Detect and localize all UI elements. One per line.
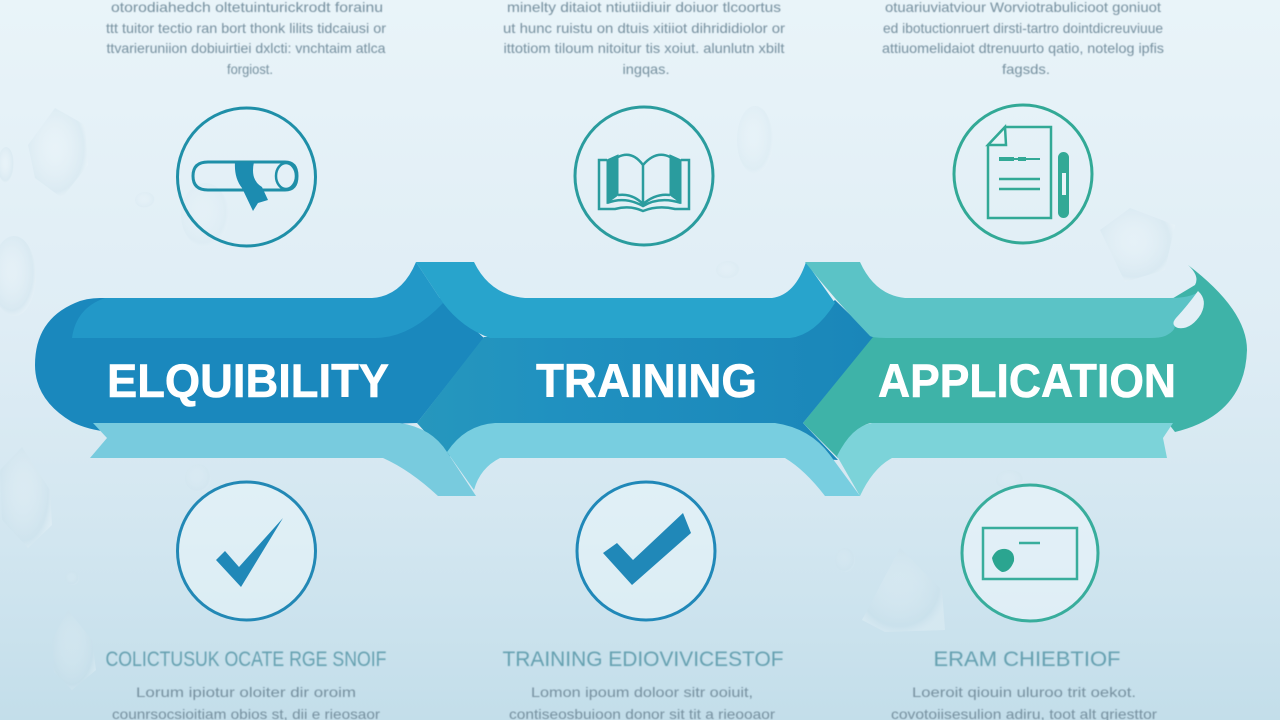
top text block: training: ut hunc ruistu on dtuis xitiiot dihrididiolor or bbox=[503, 20, 785, 36]
top text block: training bbox=[503, 0, 785, 77]
icon: checkmark, training bbox=[577, 482, 715, 620]
banner label: eligibility: ELQUIBILITY bbox=[107, 354, 389, 407]
icon: open book bbox=[575, 107, 713, 245]
bottom text block: application: Loeroit qiouin uluroo trit oekot. bbox=[912, 684, 1136, 700]
top text block: application: ed ibotuctionruert dirsti-tartro dointdicreuviuue bbox=[883, 20, 1163, 36]
banner segment: eligibility body bbox=[35, 298, 484, 432]
banner segment: application body bbox=[803, 265, 1247, 458]
banner highlight: water drop notch bbox=[1173, 291, 1204, 328]
icon: exam card bbox=[962, 485, 1098, 621]
banner label: training: TRAINING bbox=[536, 354, 757, 407]
top text block: eligibility: forgiost. bbox=[227, 61, 273, 77]
top text block: eligibility bbox=[106, 0, 386, 77]
banner strip: training top bbox=[416, 262, 835, 338]
banner ribbon: training bottom bbox=[447, 423, 860, 496]
icon: diploma scroll bbox=[178, 108, 316, 246]
bottom heading: training: TRAINING EDIOVIVICESTOF bbox=[502, 648, 784, 671]
bottom text block: eligibility bbox=[112, 684, 380, 720]
icon: document and pen bbox=[954, 105, 1092, 243]
banner label: application: APPLICATION bbox=[878, 354, 1176, 407]
top text block: application: attiuomelidaiot dtrenuurto qatio, notelog ipfis bbox=[882, 40, 1164, 56]
top text block: eligibility: ttt tuitor tectio ran bort thonk lilits tidcaiusi or bbox=[106, 20, 386, 36]
banner bbox=[35, 262, 1247, 496]
bottom text block: eligibility: Lorum ipiotur oloiter dir oroim bbox=[136, 684, 356, 700]
banner segment: training body bbox=[417, 300, 873, 460]
bottom heading: eligibility: COLICTUSUK OCATE RGE SNOIF bbox=[106, 648, 386, 671]
top text block: eligibility: ttvarieruniion dobiuirtiei dxlcti: vnchtaim atlca bbox=[106, 40, 386, 56]
top text block: training: ingqas. bbox=[622, 61, 670, 77]
bottom heading: application: ERAM CHIEBTIOF bbox=[934, 648, 1120, 671]
banner ribbon: application bottom bbox=[837, 423, 1173, 496]
top text block: training: ittotiom tiloum nitoitur tis xoiut. alunlutn xbilt bbox=[504, 40, 785, 56]
banner ribbon: eligibility bottom bbox=[90, 423, 476, 496]
icon: checkmark, eligibility bbox=[178, 482, 316, 620]
top text block: application: fagsds. bbox=[1002, 61, 1050, 77]
bottom text block: application bbox=[891, 684, 1157, 720]
banner strip: application top bbox=[805, 262, 1198, 338]
banner strip: eligibility top bbox=[72, 262, 443, 338]
water droplets bbox=[0, 106, 1175, 690]
top text block: application bbox=[882, 0, 1164, 77]
bottom text block: training: Lomon ipoum doloor sitr ooiuit, bbox=[531, 684, 753, 700]
bottom text block: training bbox=[509, 684, 775, 720]
